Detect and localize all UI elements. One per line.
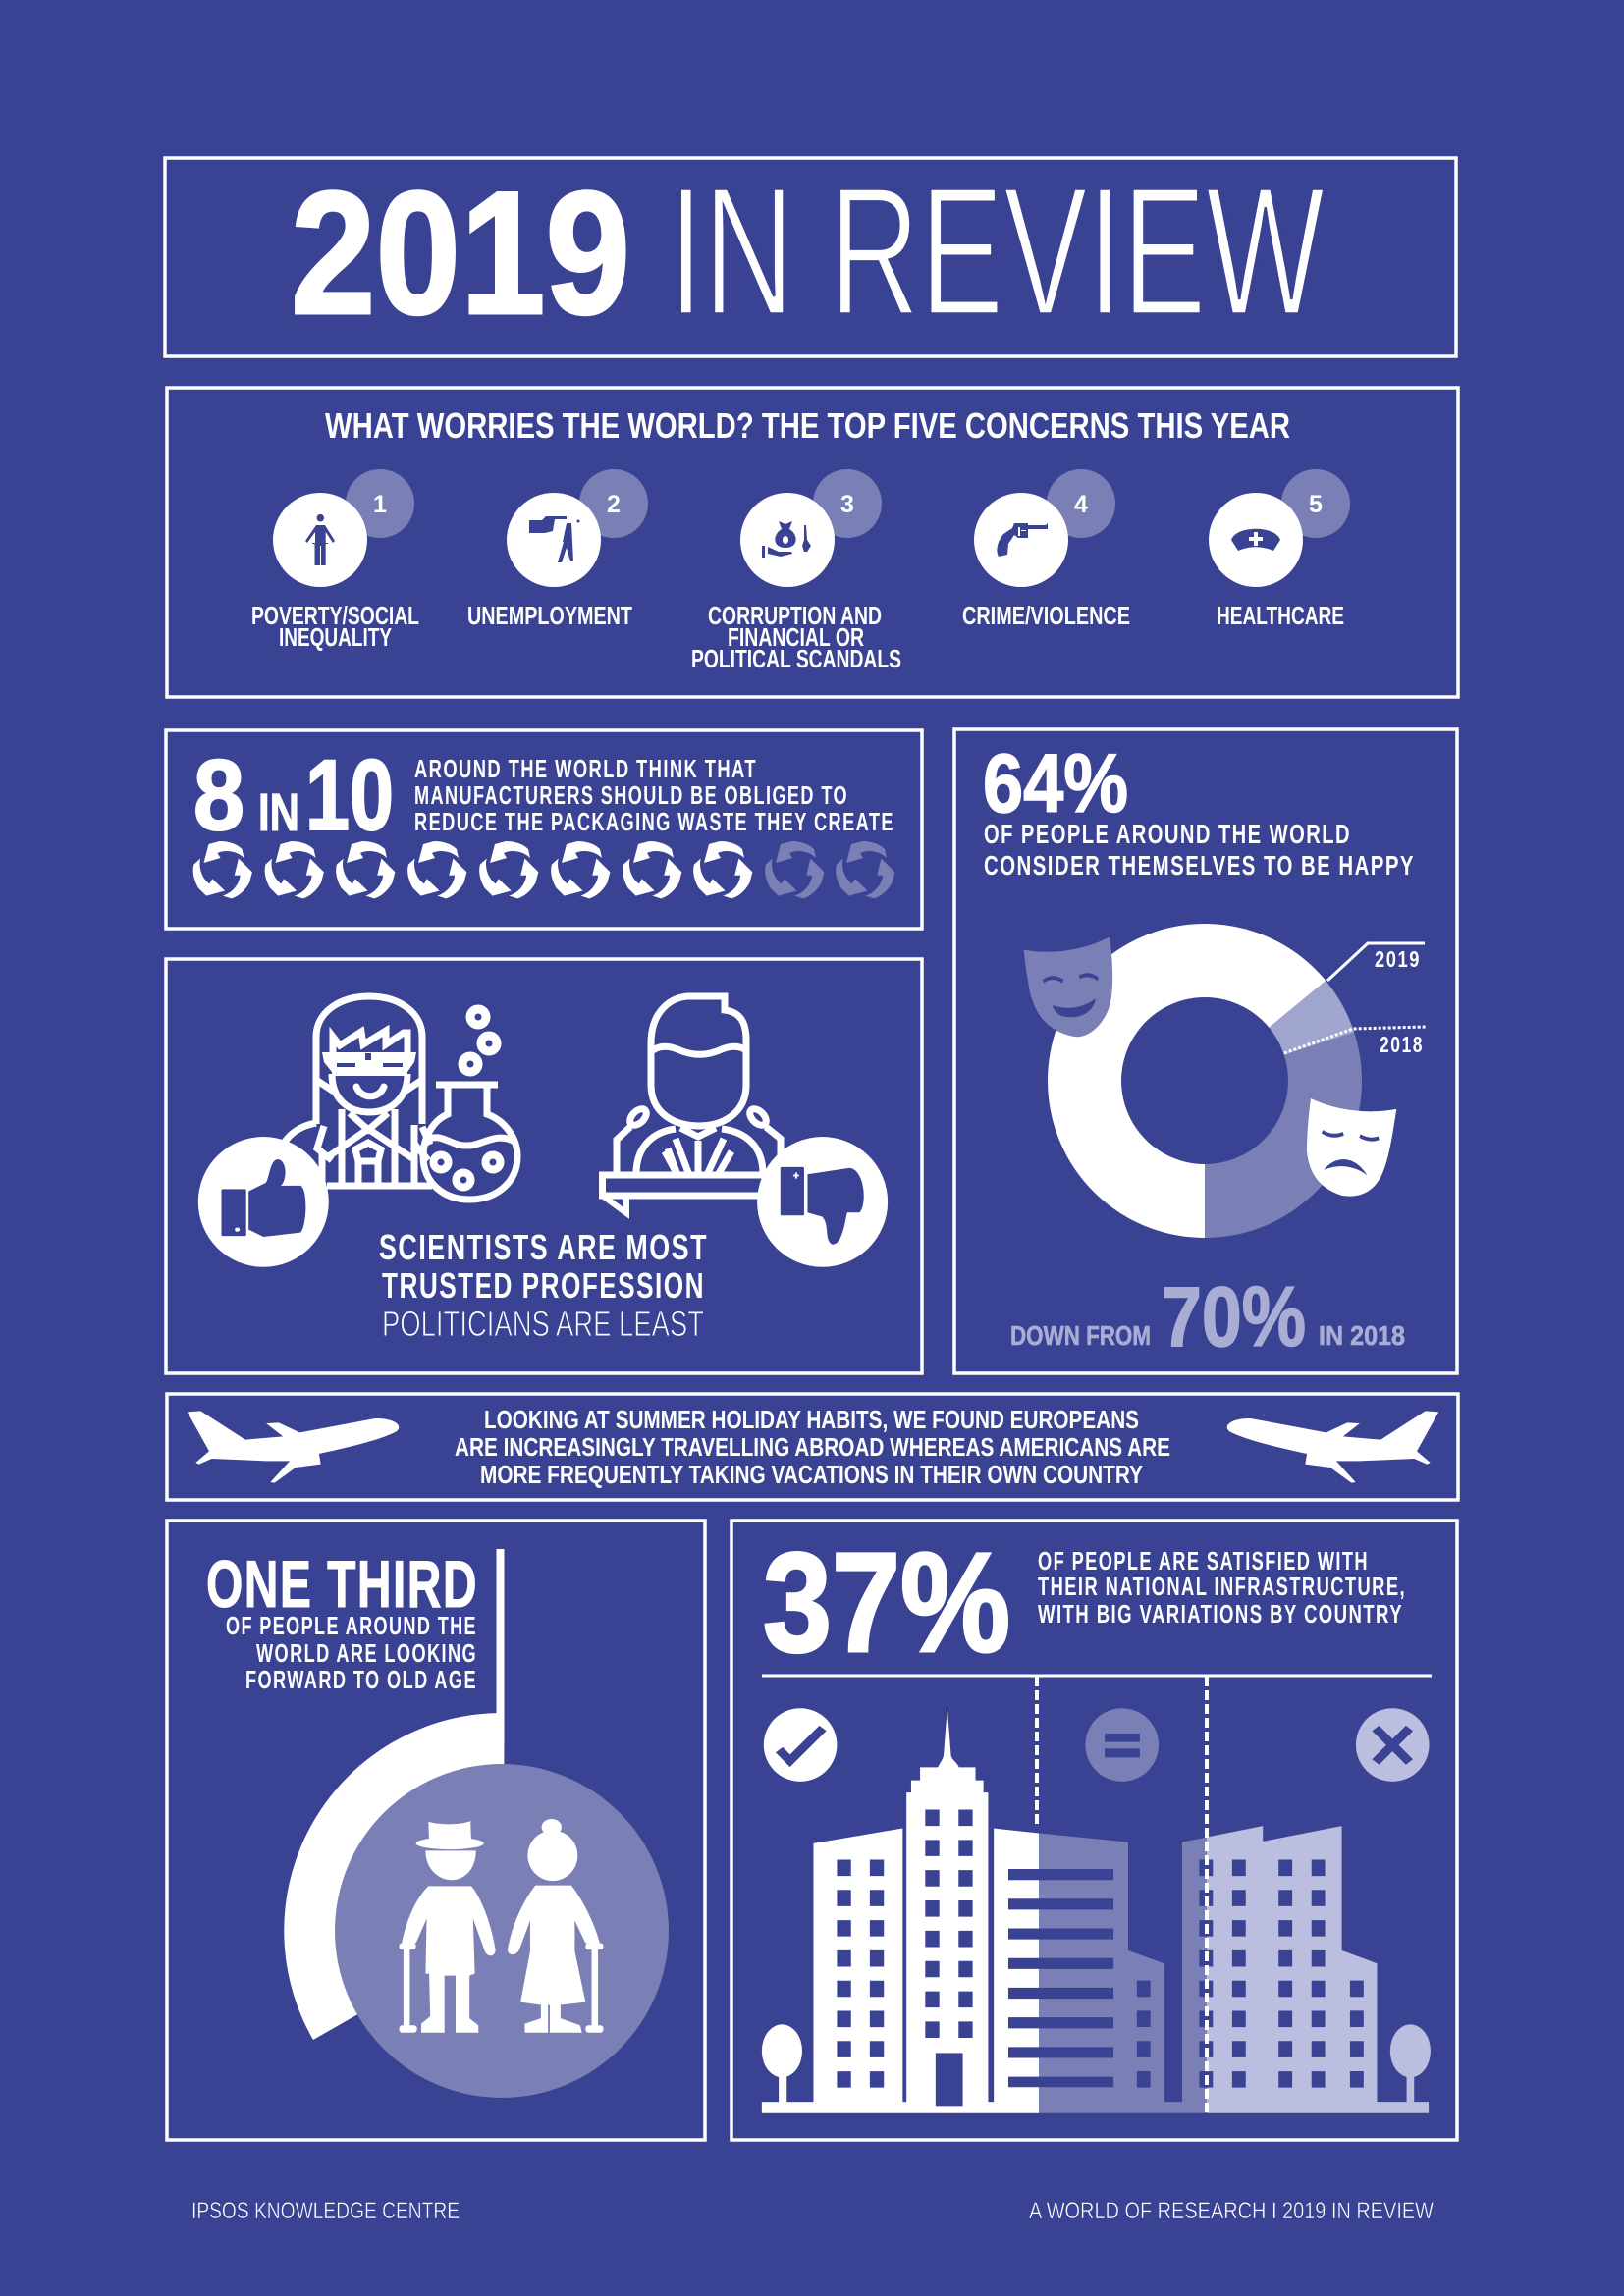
text: looking forward to old age: WORLD ARE LOOKING [256, 1638, 477, 1668]
panel: trust in professions [166, 959, 922, 1373]
title: in review: IN REVIEW [669, 150, 1325, 353]
text: national infrastructure: WITH BIG VARIATIONS BY COUNTRY [1038, 1599, 1403, 1629]
mid-tone buildings [1039, 1834, 1207, 2113]
concern 3: corruption: POLITICAL SCANDALS [691, 644, 901, 673]
concern 4: crime: 4 [1074, 491, 1088, 518]
text: scientists most trusted: TRUSTED PROFESSION [382, 1265, 705, 1306]
concern 2: unemployment: UNEMPLOYMENT [467, 601, 632, 630]
text: down from 70% in 2018 [1010, 1270, 1405, 1364]
text: packaging waste [414, 754, 894, 836]
text: consider themselves happy: OF PEOPLE AROUND THE WORLD [984, 819, 1351, 849]
callout: 2019: 2019 [1375, 946, 1421, 972]
text: consider themselves happy: CONSIDER THEMSELVES TO BE HAPPY [984, 850, 1415, 881]
stat: 8 in 10 [193, 739, 394, 851]
text: looking forward to old age: FORWARD TO OLD AGE [245, 1665, 477, 1694]
icon: pointing hand and man [529, 516, 579, 562]
windows [844, 1809, 1357, 2088]
callout: 2019 [1327, 943, 1425, 981]
icon: cross [1356, 1708, 1430, 1782]
title: 2019: 2019 [291, 155, 630, 350]
stat: 8 in 10: 10 [305, 739, 394, 851]
callout: 2018: 2018 [1380, 1032, 1424, 1057]
panel: title [165, 150, 1456, 356]
stat: 64%: 64% [983, 737, 1128, 829]
text: down from 70% in 2018: 70% [1162, 1270, 1306, 1364]
panel: top five concerns [167, 388, 1458, 697]
text: holiday habits: MORE FREQUENTLY TAKING VACATIONS IN THEIR OWN COUNTRY [480, 1460, 1143, 1489]
donut chart [1048, 924, 1362, 1238]
chart: one third arc [284, 1549, 669, 2098]
icon: thumbs down [757, 1137, 888, 1267]
icon: money bag in hand [762, 521, 811, 558]
icon row: recycling symbols, 8 of 10 highlighted [187, 841, 899, 904]
icon: revolver [997, 523, 1048, 557]
stat: 8 in 10: 8 [193, 739, 244, 851]
icon: plane left [188, 1411, 399, 1483]
concern 5: healthcare: HEALTHCARE [1217, 601, 1344, 630]
icon: sad mask [1307, 1098, 1396, 1197]
text: national infrastructure: THEIR NATIONAL INFRASTRUCTURE, [1038, 1572, 1406, 1601]
icon: elderly couple [400, 1819, 603, 2033]
text: looking forward to old age: OF PEOPLE AROUND THE [226, 1611, 477, 1640]
divider lines [1037, 1677, 1207, 2113]
concern 3: corruption [691, 469, 901, 673]
footer: left: IPSOS KNOWLEDGE CENTRE [191, 2198, 460, 2224]
concern 3: corruption: FINANCIAL OR [728, 622, 864, 652]
text: down from 70% in 2018: DOWN FROM [1010, 1320, 1151, 1351]
icon: happy mask [1024, 937, 1112, 1037]
concern 3: corruption: CORRUPTION AND [708, 601, 882, 630]
text: holiday habits [455, 1405, 1170, 1489]
text: national infrastructure: OF PEOPLE ARE SATISFIED WITH [1038, 1546, 1369, 1575]
text: scientists most trusted: SCIENTISTS ARE MOST [379, 1227, 708, 1267]
concern 1: poverty: 1 [373, 491, 387, 518]
panel: summer holidays banner [167, 1394, 1458, 1500]
concern 5: healthcare [1209, 469, 1350, 630]
icon: nurse cap [1231, 529, 1280, 551]
heading: one third: ONE THIRD [206, 1547, 478, 1622]
text: holiday habits: ARE INCREASINGLY TRAVELLING ABROAD WHEREAS AMERICANS ARE [455, 1432, 1170, 1462]
panel: infrastructure [731, 1521, 1457, 2140]
text: packaging waste: AROUND THE WORLD THINK THAT [414, 754, 757, 783]
icon: equals [1085, 1708, 1159, 1782]
white buildings [762, 1708, 1039, 2113]
concern 1: poverty [251, 469, 419, 652]
concern 4: crime: CRIME/VIOLENCE [962, 601, 1130, 630]
text: holiday habits: LOOKING AT SUMMER HOLIDAY HABITS, WE FOUND EUROPEANS [484, 1405, 1139, 1434]
text: looking forward to old age [226, 1611, 477, 1694]
icon: person [305, 514, 335, 565]
panel: one third old age [167, 1521, 705, 2140]
stat: 37%: 37% [763, 1523, 1010, 1682]
concern 4: crime [962, 469, 1130, 630]
footer: right: A WORLD OF RESEARCH I 2019 IN REVIEW [1029, 2198, 1434, 2224]
concern 5: healthcare: 5 [1309, 491, 1323, 518]
stat: 8 in 10: IN [258, 783, 299, 842]
text: consider themselves happy [984, 819, 1415, 881]
illustration: scientist with flask [283, 996, 517, 1200]
illustration: city skyline in three tones [762, 1708, 1431, 2113]
panel: happiness [954, 729, 1457, 1373]
panel: 8 in 10 [166, 730, 922, 929]
icon: check [764, 1708, 837, 1782]
callout: 2018 [1284, 1027, 1426, 1057]
concern 1: poverty: INEQUALITY [279, 622, 392, 652]
icon: plane right [1227, 1411, 1438, 1483]
concern 1: poverty: POVERTY/SOCIAL [251, 601, 419, 630]
text: down from 70% in 2018: IN 2018 [1319, 1320, 1405, 1351]
text: packaging waste: MANUFACTURERS SHOULD BE OBLIGED TO [414, 780, 848, 810]
concern 2: unemployment: 2 [607, 491, 621, 518]
text: packaging waste: REDUCE THE PACKAGING WASTE THEY CREATE [414, 807, 894, 836]
text: scientists most trusted: POLITICIANS ARE LEAST [382, 1304, 704, 1344]
heading: what worries the world: WHAT WORRIES THE WORLD? THE TOP FIVE CONCERNS THIS YEAR [325, 405, 1290, 446]
concern 2: unemployment [467, 469, 648, 630]
concern 3: corruption: 3 [840, 491, 854, 518]
icon: thumbs up [198, 1137, 329, 1267]
text: scientists most trusted [379, 1227, 708, 1344]
light buildings [1207, 1826, 1431, 2113]
illustration: politician at podium [603, 996, 781, 1213]
text: national infrastructure [1038, 1546, 1406, 1629]
